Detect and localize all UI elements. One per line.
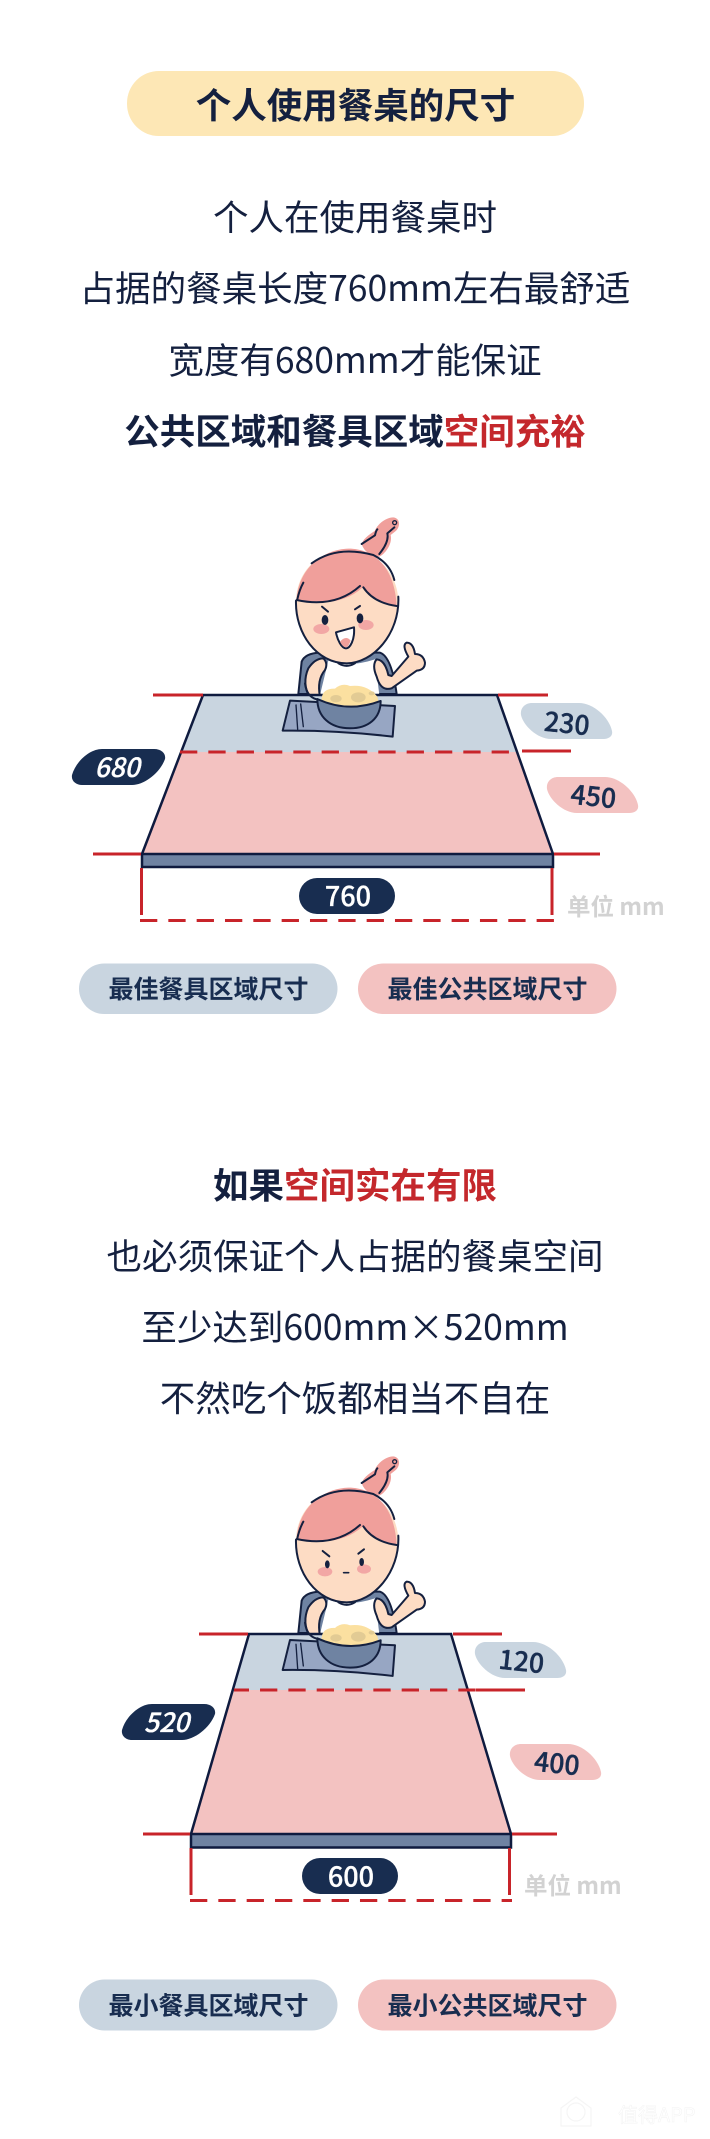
hair — [297, 549, 397, 606]
badge: 450 — [547, 773, 638, 816]
unit label: 单位 mm — [524, 1867, 622, 1901]
chart: minimum table dimensions — [79, 1456, 695, 2128]
watermark text: 值得APP — [618, 2099, 695, 2128]
character: happy girl at table, back layer — [296, 517, 425, 698]
character: bowl and placemat — [283, 683, 395, 737]
second section text line 3: 不然吃个饭都相当不自在 — [160, 1371, 550, 1422]
badge: 760 — [299, 875, 395, 914]
head lines — [296, 551, 398, 663]
badge: 600: 600 — [328, 1856, 374, 1894]
food — [319, 1624, 380, 1648]
left hand — [305, 683, 317, 699]
chair — [298, 1592, 397, 1633]
intro emphasis line: 公共区域和餐具区域空间充裕 — [124, 404, 586, 454]
neck — [338, 1602, 355, 1605]
eyes — [322, 615, 328, 625]
intro text line 3: 宽度有680mm才能保证 — [168, 332, 542, 384]
public zone — [191, 1690, 511, 1834]
badge: 400 — [510, 1740, 601, 1783]
left arm — [305, 658, 326, 698]
unit label: 单位 mm — [567, 888, 665, 922]
character: bowl and placemat — [283, 1623, 395, 1676]
hair — [297, 1488, 397, 1545]
face — [296, 550, 398, 663]
hair bun — [362, 1456, 399, 1496]
left arm — [305, 1597, 326, 1637]
second section heading line: 如果空间实在有限 — [213, 1158, 497, 1209]
dining zone — [233, 1634, 468, 1690]
placemat — [283, 1640, 395, 1676]
title pill — [127, 71, 584, 136]
hair bun — [362, 517, 399, 557]
badge: 230 — [521, 700, 612, 743]
red dimension lines — [93, 695, 600, 920]
legend: minimum public zone: 最小公共区域尺寸 — [387, 1986, 588, 2022]
neck — [338, 663, 355, 666]
badge: 600 — [302, 1856, 398, 1894]
badge: 450: 450 — [569, 773, 618, 816]
mouth — [344, 1570, 349, 1575]
dining zone — [181, 695, 517, 752]
badge: 680 — [72, 746, 165, 785]
brows — [322, 606, 360, 612]
legend: minimum dining zone — [79, 1980, 338, 2030]
eyes — [325, 1560, 330, 1568]
intro text line 1: 个人在使用餐桌时 — [213, 190, 497, 240]
legend: dining zone — [79, 964, 338, 1014]
watermark logo icon — [561, 2097, 591, 2126]
intro text line 2: 占据的餐桌长度760mm左右最舒适 — [80, 260, 630, 312]
left hand — [305, 1623, 317, 1639]
legend: public zone — [358, 964, 616, 1014]
tank top — [320, 1598, 379, 1634]
table surface — [142, 695, 553, 867]
red dimension lines — [143, 1634, 557, 1900]
table surface — [191, 1634, 511, 1848]
chart: best table dimensions — [72, 517, 665, 1014]
right arm and thumb — [374, 643, 425, 689]
legend: minimum public zone — [358, 1980, 616, 2030]
mouth — [336, 627, 354, 648]
title pill: 个人使用餐桌的尺寸 — [196, 78, 515, 129]
badge: 400: 400 — [533, 1740, 582, 1783]
badge: 760: 760 — [325, 875, 371, 914]
blush — [313, 624, 329, 634]
table front edge — [142, 854, 553, 867]
face — [296, 1489, 398, 1602]
badge: 230: 230 — [543, 700, 592, 743]
badge: 520: 520 — [142, 1701, 197, 1740]
legend: public zone: 最佳公共区域尺寸 — [387, 970, 588, 1006]
placemat — [283, 701, 395, 737]
bowl — [317, 699, 381, 728]
legend: dining zone: 最佳餐具区域尺寸 — [108, 970, 309, 1006]
head lines — [296, 1490, 398, 1602]
chair — [298, 653, 397, 694]
public zone — [142, 752, 553, 854]
table front edge — [191, 1834, 511, 1848]
tank top — [320, 659, 379, 695]
badge: 120: 120 — [497, 1638, 546, 1681]
food — [319, 685, 380, 708]
right arm and thumb — [374, 1582, 425, 1628]
second section text line 1: 也必须保证个人占据的餐桌空间 — [106, 1229, 604, 1280]
badge: 120 — [475, 1638, 566, 1681]
table outline — [142, 695, 553, 854]
brows — [323, 1549, 364, 1556]
second section text line 2: 至少达到600mm×520mm — [141, 1300, 569, 1351]
legend: minimum dining zone: 最小餐具区域尺寸 — [108, 1986, 309, 2022]
bowl — [317, 1638, 381, 1668]
blush — [318, 1567, 332, 1576]
badge: 520 — [122, 1701, 215, 1740]
character: serious girl at table, back layer — [296, 1456, 425, 1637]
badge: 680: 680 — [92, 746, 147, 785]
table outline — [191, 1634, 511, 1834]
